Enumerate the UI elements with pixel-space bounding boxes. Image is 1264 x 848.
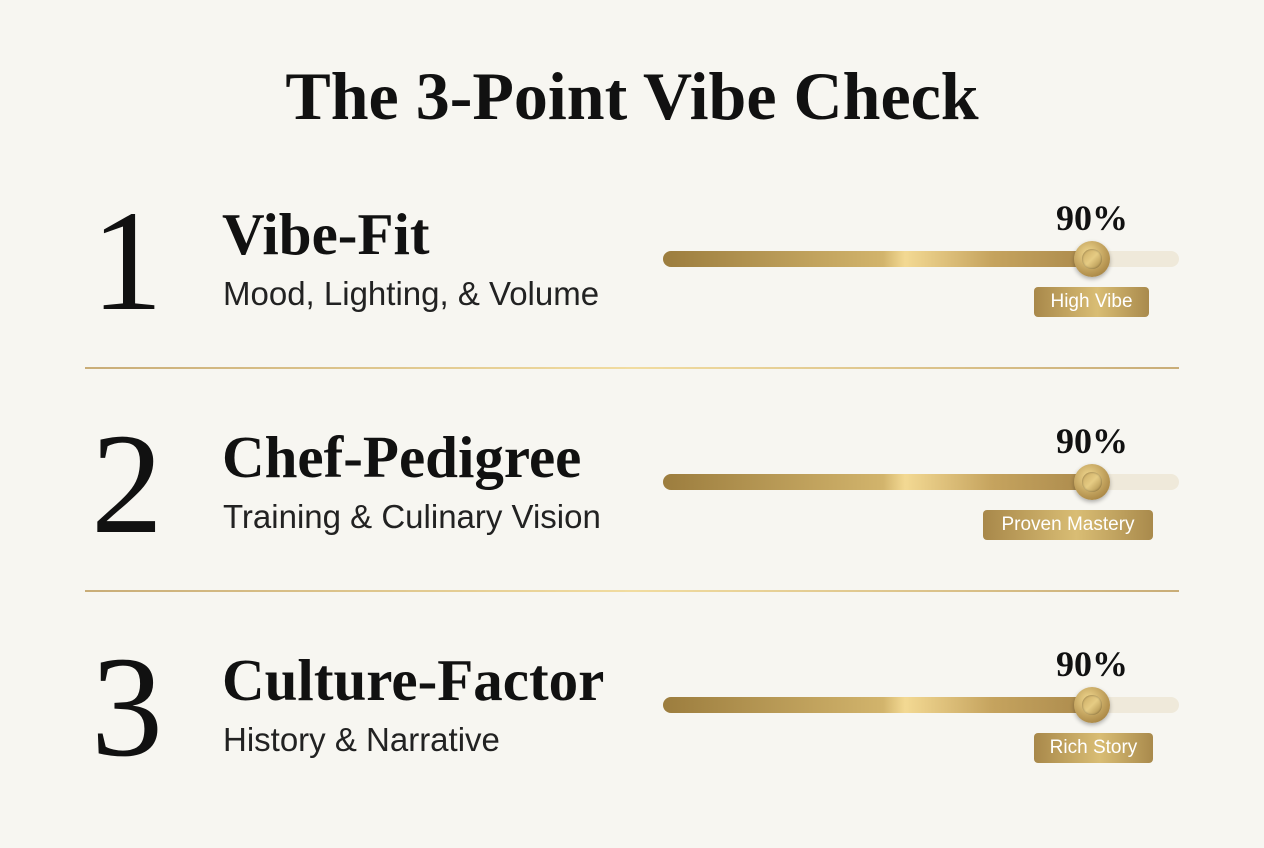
slider 1 (663, 251, 1179, 267)
row 2 (91, 405, 1179, 564)
slider 2 (663, 474, 1179, 490)
label 2 (983, 510, 1153, 540)
row 1 (91, 182, 1179, 341)
number 3: 3 (91, 628, 163, 787)
label 3: Rich Story (1050, 737, 1137, 758)
label 3 (1034, 733, 1153, 763)
number 1: 1 (91, 182, 163, 341)
label 1: High Vibe (1050, 291, 1133, 312)
heading 2: Chef-Pedigree (222, 424, 581, 490)
row 3 (91, 628, 1179, 787)
subtitle 1: Mood, Lighting, & Volume (223, 275, 599, 312)
subtitle 3: History & Narrative (223, 721, 500, 758)
heading 1: Vibe-Fit (222, 201, 430, 267)
subtitle 2: Training & Culinary Vision (223, 498, 601, 535)
percent 3: 90% (1056, 644, 1128, 684)
percent 1: 90% (1056, 198, 1128, 238)
slider 3 (663, 697, 1179, 713)
percent 2: 90% (1056, 421, 1128, 461)
heading 3: Culture-Factor (222, 647, 604, 713)
number 2: 2 (91, 405, 163, 564)
label 2: Proven Mastery (1001, 514, 1135, 535)
title: The 3-Point Vibe Check (285, 58, 979, 134)
label 1 (1034, 287, 1149, 317)
